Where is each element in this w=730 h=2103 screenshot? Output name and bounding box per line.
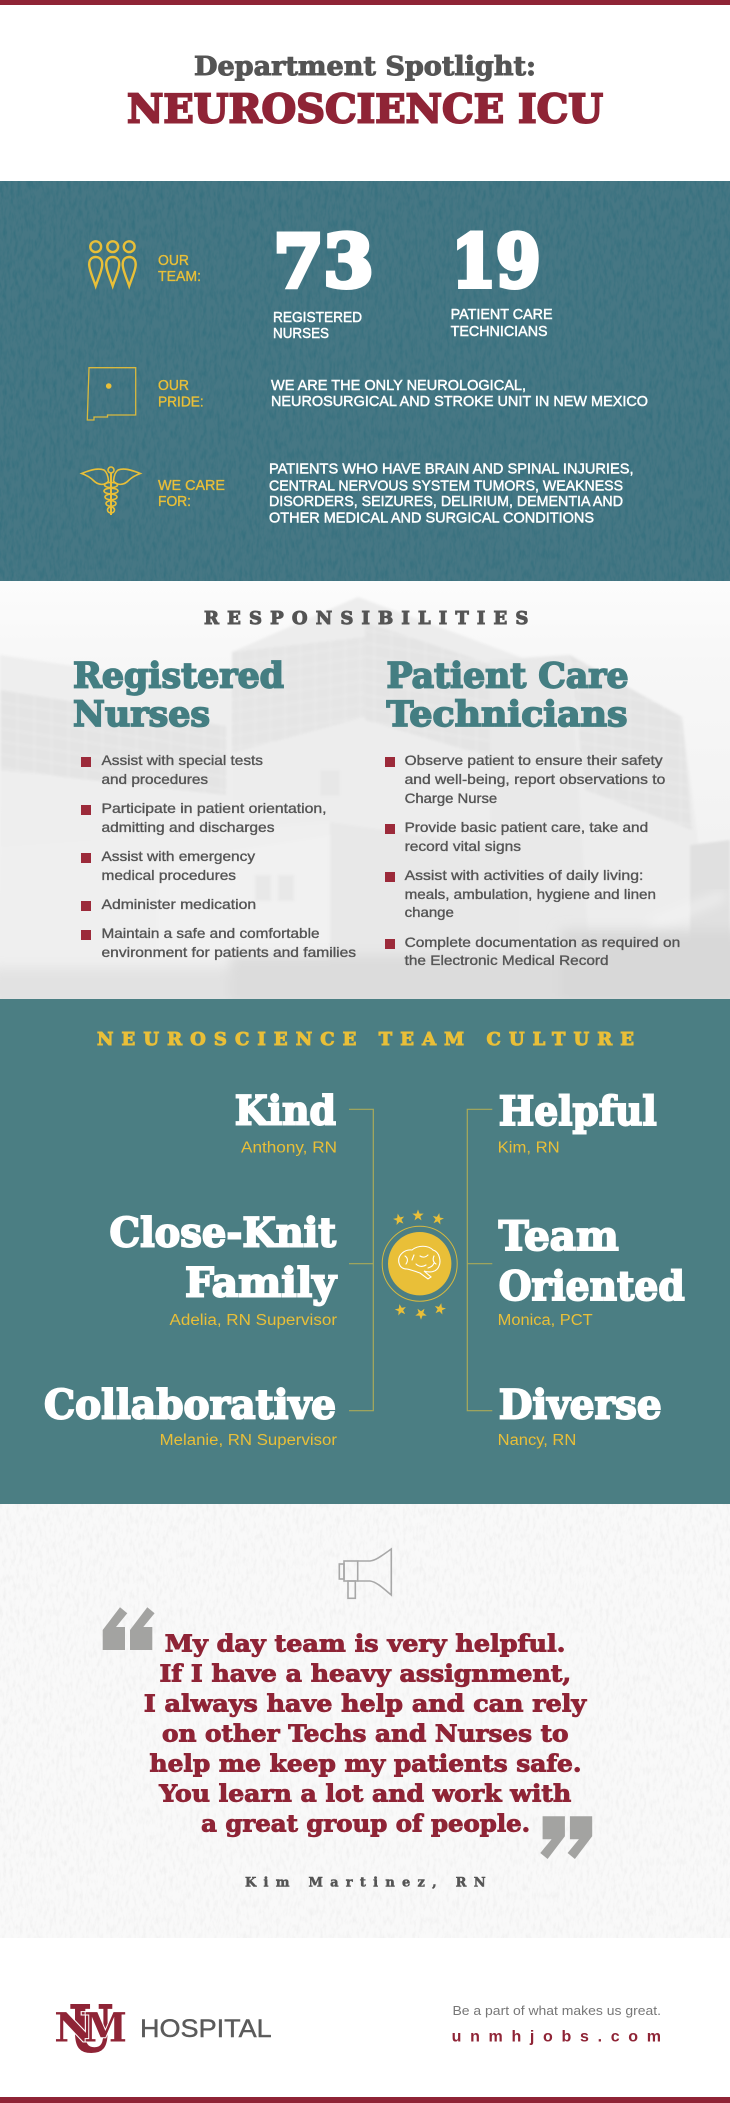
- bullet: emergency: medical procedures: [102, 867, 236, 883]
- value: diverse: Nancy, RN: [498, 1432, 576, 1449]
- bullet: environment: environment for patients and families: [102, 944, 356, 960]
- text: pride statement: [271, 378, 648, 410]
- bullet: environment: Maintain a safe and comfortable: [102, 925, 320, 941]
- value: kind: Kind: [235, 1088, 336, 1134]
- stat: 19 patient care technicians: PATIENT CARE: [451, 307, 553, 323]
- stat: 73 registered nurses: NURSES: [273, 326, 329, 342]
- text: pride statement: WE ARE THE ONLY NEUROLOGICAL,: [271, 378, 526, 394]
- label: our pride: PRIDE:: [158, 395, 204, 411]
- label: we care for: WE CARE: [158, 478, 225, 494]
- heading: neuroscience team culture: NEUROSCIENCE TEAM CULTURE: [97, 1029, 634, 1050]
- bullet: tests: and procedures: [102, 771, 208, 787]
- tagline: Be a part of what makes us great.: [452, 2003, 661, 2018]
- value: team oriented: Monica, PCT: [498, 1312, 593, 1329]
- heading: registered nurses: Registered: [73, 656, 284, 696]
- heading: responsibilities: RESPONSIBILITIES: [204, 608, 528, 629]
- heading: registered nurses: Nurses: [73, 694, 210, 735]
- logo mark: interlocked U N M: U: [69, 1992, 113, 2068]
- logo: UNM Hospital: [54, 1992, 272, 2068]
- value: collaborative: [44, 1382, 337, 1449]
- bullet: documentation: [385, 934, 680, 968]
- list: registered nurse duties: [81, 752, 356, 960]
- bullet: tests: [81, 752, 263, 787]
- value: close-knit family: Adelia, RN Supervisor: [170, 1312, 337, 1329]
- stat: 73 registered nurses: 73: [274, 218, 374, 304]
- title: department spotlight: Department Spotlight:: [194, 52, 536, 82]
- icon: opening quote mark: [103, 1607, 155, 1650]
- value: helpful: Helpful: [499, 1088, 657, 1135]
- icon: caduceus: [82, 467, 140, 515]
- quote text: My day team is very helpful.: [165, 1630, 566, 1658]
- logo word: hospital: HOSPITAL: [140, 2015, 272, 2043]
- heading: patient care technicians: [386, 656, 628, 735]
- panel: responsibilities: [0, 581, 730, 1008]
- website: unmhjobs.com: [452, 2028, 661, 2046]
- label: our pride: OUR: [158, 378, 189, 394]
- value: team oriented: Oriented: [499, 1263, 685, 1310]
- hospital building backdrop: [0, 581, 730, 1008]
- value: diverse: Diverse: [499, 1382, 662, 1428]
- bullet: orientation: Participate in patient orientation,: [102, 800, 326, 816]
- bullet: observe: Observe patient to ensure their safety: [405, 752, 663, 768]
- title: [127, 52, 603, 132]
- bullet: basic care: Provide basic patient care, take and: [405, 819, 648, 835]
- heading: patient care technicians: Patient Care: [386, 656, 628, 696]
- label: our pride: [158, 378, 204, 411]
- panel: testimonial: [0, 1504, 730, 1938]
- heading: patient care technicians: Technicians: [386, 694, 628, 735]
- value: collaborative: Collaborative: [44, 1382, 336, 1428]
- quote text: [144, 1630, 588, 1838]
- bullet: observe: [385, 752, 666, 806]
- list: patient care technician duties: [385, 752, 680, 968]
- label: we care for: FOR:: [158, 494, 191, 510]
- bullet: environment: [81, 925, 356, 960]
- bullet: orientation: [81, 800, 326, 835]
- bullet: basic care: record vital signs: [405, 838, 521, 854]
- bullet: tests: Assist with special tests: [102, 752, 263, 768]
- stat: 19 patient care technicians: [451, 218, 553, 340]
- stat: 19 patient care technicians: TECHNICIANS: [451, 324, 548, 340]
- logo mark: interlocked U N M: M: [84, 2004, 127, 2052]
- connector lines: left: [349, 1109, 373, 1411]
- icon: team of three people: [89, 241, 136, 286]
- value: close-knit family: [110, 1210, 338, 1329]
- value: kind: [235, 1088, 337, 1157]
- quote text: If I have a heavy assignment,: [160, 1660, 571, 1688]
- value: helpful: [498, 1088, 657, 1157]
- icon: closing quote mark: [540, 1816, 592, 1859]
- text: patient conditions: CENTRAL NERVOUS SYSTEM TUMORS, WEAKNESS: [269, 478, 623, 494]
- bullet: observe: and well-being, report observations to: [405, 771, 666, 787]
- value: helpful: Kim, RN: [498, 1140, 560, 1157]
- text: patient conditions: OTHER MEDICAL AND SURGICAL CONDITIONS: [269, 510, 594, 526]
- icon: brain medallion with stars: [382, 1210, 457, 1320]
- stat: 19 patient care technicians: 19: [452, 218, 540, 304]
- bullet: daily living: [385, 867, 656, 920]
- value: diverse: [498, 1382, 662, 1449]
- text: pride statement: NEUROSURGICAL AND STROKE UNIT IN NEW MEXICO: [271, 394, 648, 410]
- bullet: documentation: the Electronic Medical Record: [405, 952, 609, 968]
- top bar: [0, 0, 730, 5]
- label: we care for: [158, 478, 225, 510]
- panel: department facts: [0, 181, 730, 581]
- bullet: emergency: [81, 848, 255, 883]
- quote text: a great group of people.: [201, 1810, 530, 1838]
- panel: team culture: [0, 999, 730, 1504]
- label: our team: TEAM:: [158, 269, 201, 285]
- value: kind: Anthony, RN: [241, 1140, 337, 1157]
- bullet: orientation: admitting and discharges: [102, 819, 274, 835]
- bullet: medication: Administer medication: [102, 896, 256, 912]
- bullet: daily living: change: [405, 904, 454, 920]
- quote text: You learn a lot and work with: [158, 1780, 571, 1808]
- bottom bar: [0, 2097, 730, 2103]
- bullet: daily living: Assist with activities of daily living:: [405, 867, 643, 883]
- stat: 73 registered nurses: REGISTERED: [273, 310, 362, 326]
- value: team oriented: Team: [499, 1213, 619, 1260]
- heading: registered nurses: [73, 656, 284, 735]
- bullet: emergency: Assist with emergency: [102, 848, 255, 864]
- quote text: help me keep my patients safe.: [150, 1750, 582, 1778]
- quote text: on other Techs and Nurses to: [162, 1720, 568, 1748]
- label: our team: OUR: [158, 253, 189, 269]
- title: neuroscience icu: NEUROSCIENCE ICU: [127, 86, 603, 132]
- icon: new mexico map: [87, 368, 136, 420]
- bullet: basic care: [385, 819, 648, 854]
- text: patient conditions: DISORDERS, SEIZURES, DELIRIUM, DEMENTIA AND: [269, 494, 623, 510]
- stat: 73 registered nurses: [273, 218, 374, 342]
- bullet: daily living: meals, ambulation, hygiene and linen: [405, 886, 656, 902]
- logo mark: interlocked U N M: N: [54, 2004, 95, 2052]
- value: close-knit family: Family: [185, 1260, 338, 1306]
- quote attribution: Kim Martinez, RN: [245, 1876, 486, 1890]
- connector lines: right: [467, 1109, 492, 1411]
- icon: megaphone: [339, 1549, 391, 1598]
- value: close-knit family: Close-Knit: [110, 1210, 336, 1256]
- quote text: I always have help and can rely: [144, 1690, 588, 1718]
- call to action: [452, 2003, 661, 2046]
- bullet: observe: Charge Nurse: [405, 790, 497, 806]
- text: patient conditions: [269, 462, 634, 526]
- text: patient conditions: PATIENTS WHO HAVE BRAIN AND SPINAL INJURIES,: [269, 462, 634, 478]
- label: our team: [158, 253, 201, 285]
- value: collaborative: Melanie, RN Supervisor: [160, 1432, 337, 1449]
- value: team oriented: [498, 1213, 685, 1329]
- bullet: documentation: Complete documentation as required on: [405, 934, 680, 950]
